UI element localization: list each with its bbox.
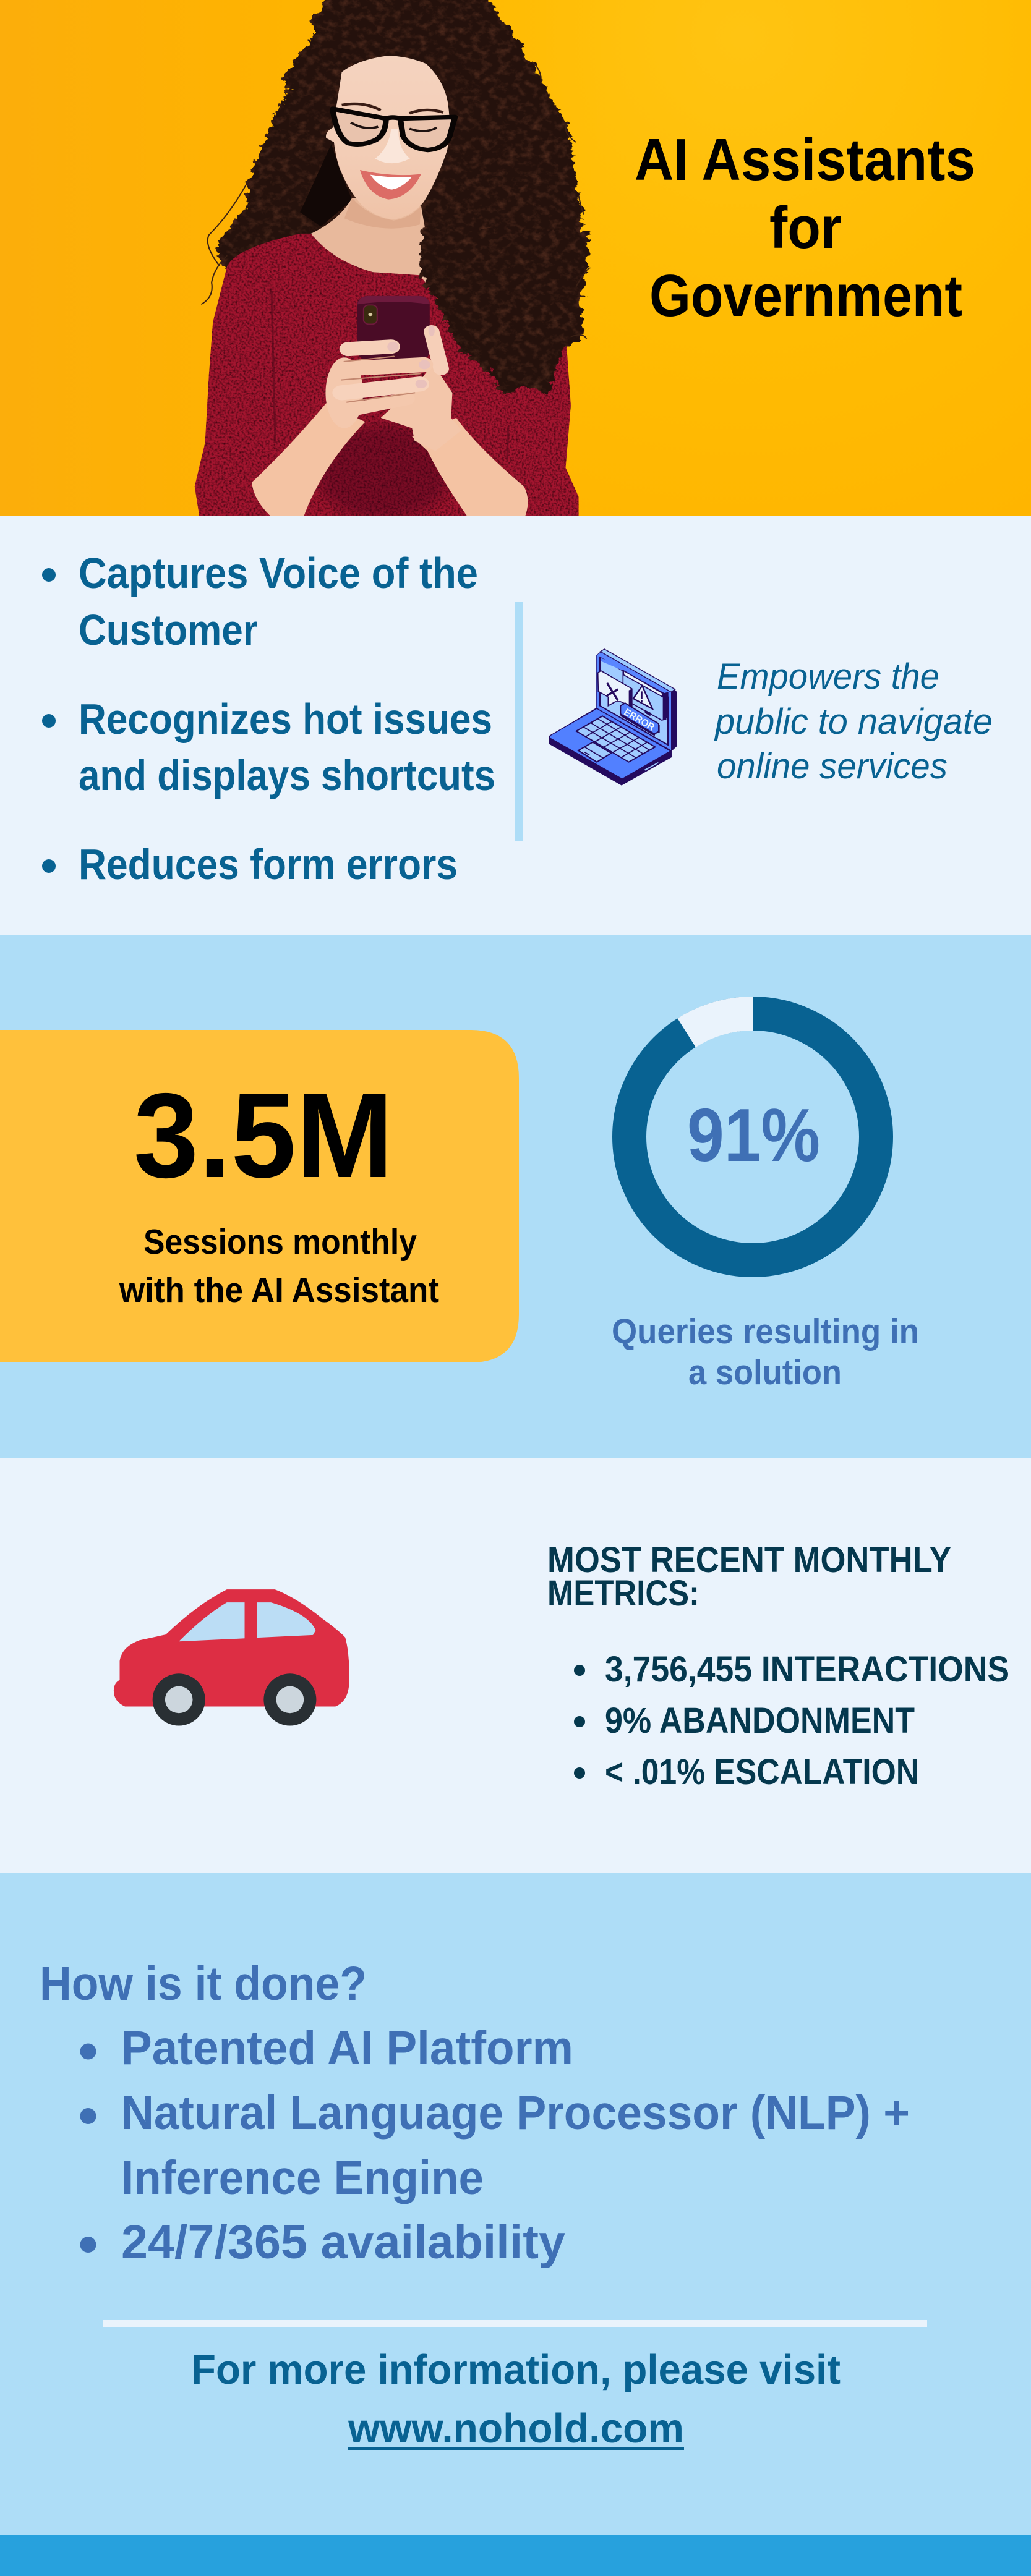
forearms xyxy=(252,403,528,519)
hands xyxy=(325,325,461,451)
footer bar xyxy=(0,2535,1031,2576)
laptop caption: Empowers the xyxy=(717,657,939,697)
neck and sweater xyxy=(300,144,435,289)
sessions card xyxy=(0,1030,519,1362)
metrics heading: MOST RECENT MONTHLY xyxy=(547,1540,951,1580)
mouth xyxy=(360,170,421,200)
how background xyxy=(0,1873,1031,2535)
panel: key statistics xyxy=(0,935,1031,1458)
arms, phone and hands xyxy=(252,296,528,519)
sessions caption xyxy=(119,1222,439,1310)
title: AI Assistants xyxy=(635,127,975,193)
phone xyxy=(357,296,430,360)
photo: woman with phone xyxy=(195,0,590,520)
benefit bullet list: Captures Voice of the xyxy=(79,549,478,597)
donut chart 91%: 91% xyxy=(687,1093,820,1177)
metrics background xyxy=(0,1458,1031,1873)
nose xyxy=(375,129,410,163)
eyes xyxy=(351,122,437,131)
laptop caption xyxy=(714,657,993,786)
laptop caption: online services xyxy=(717,746,948,786)
contact call to action: For more information, please visit xyxy=(191,2347,841,2393)
title xyxy=(635,127,975,329)
statistics background xyxy=(0,935,1031,1458)
benefit bullet list: and displays shortcuts xyxy=(79,751,495,799)
sessions caption: Sessions monthly xyxy=(143,1222,417,1262)
donut caption xyxy=(612,1312,919,1392)
panel: benefits xyxy=(0,516,1031,935)
chin shadow xyxy=(344,198,421,229)
face xyxy=(326,56,455,229)
donut caption: Queries resulting in xyxy=(612,1312,919,1351)
how bullet list xyxy=(80,2021,910,2269)
glasses xyxy=(333,109,455,150)
metrics heading xyxy=(547,1540,951,1613)
donut chart 91% xyxy=(630,997,876,1260)
metrics bullet list: 3,756,455 INTERACTIONS xyxy=(605,1649,1009,1690)
contact call to action xyxy=(191,2347,841,2452)
panel: hero xyxy=(0,0,1031,520)
panel: how is it done xyxy=(0,1873,1031,2535)
metrics bullet list xyxy=(574,1649,1009,1792)
hero background xyxy=(0,0,1031,516)
panel: monthly metrics xyxy=(0,1458,1031,1873)
how bullet list: Inference Engine xyxy=(121,2151,484,2204)
benefit bullet list: Reduces form errors xyxy=(79,840,458,888)
metrics bullet list: < .01% ESCALATION xyxy=(605,1752,919,1792)
how bullet list: Patented AI Platform xyxy=(121,2021,573,2075)
title: Government xyxy=(649,263,962,329)
benefit bullet list xyxy=(42,549,495,888)
donut caption: a solution xyxy=(688,1353,842,1392)
benefit bullet list: Customer xyxy=(79,606,258,654)
how heading: How is it done? xyxy=(40,1957,367,2010)
icon: red car xyxy=(114,1589,349,1726)
title: for xyxy=(769,195,842,261)
how bullet list: 24/7/365 availability xyxy=(121,2216,565,2269)
metrics bullet list: 9% ABANDONMENT xyxy=(605,1701,915,1741)
how bullet list: Natural Language Processor (NLP) + xyxy=(121,2086,910,2140)
benefit bullet list: Recognizes hot issues xyxy=(79,695,492,743)
hair front xyxy=(201,231,590,397)
sessions number: 3.5M xyxy=(134,1068,393,1203)
sessions caption: with the AI Assistant xyxy=(119,1270,439,1310)
eyebrows xyxy=(342,104,443,113)
metrics heading: METRICS: xyxy=(547,1573,699,1613)
laptop caption: public to navigate xyxy=(714,702,993,742)
benefits background xyxy=(0,516,1031,935)
hair back xyxy=(208,0,588,272)
icon: laptop with error: ERROR xyxy=(622,707,656,733)
icon: laptop with error xyxy=(549,648,677,786)
sweater xyxy=(195,234,579,520)
contact call to action: www.nohold.com xyxy=(348,2405,684,2452)
